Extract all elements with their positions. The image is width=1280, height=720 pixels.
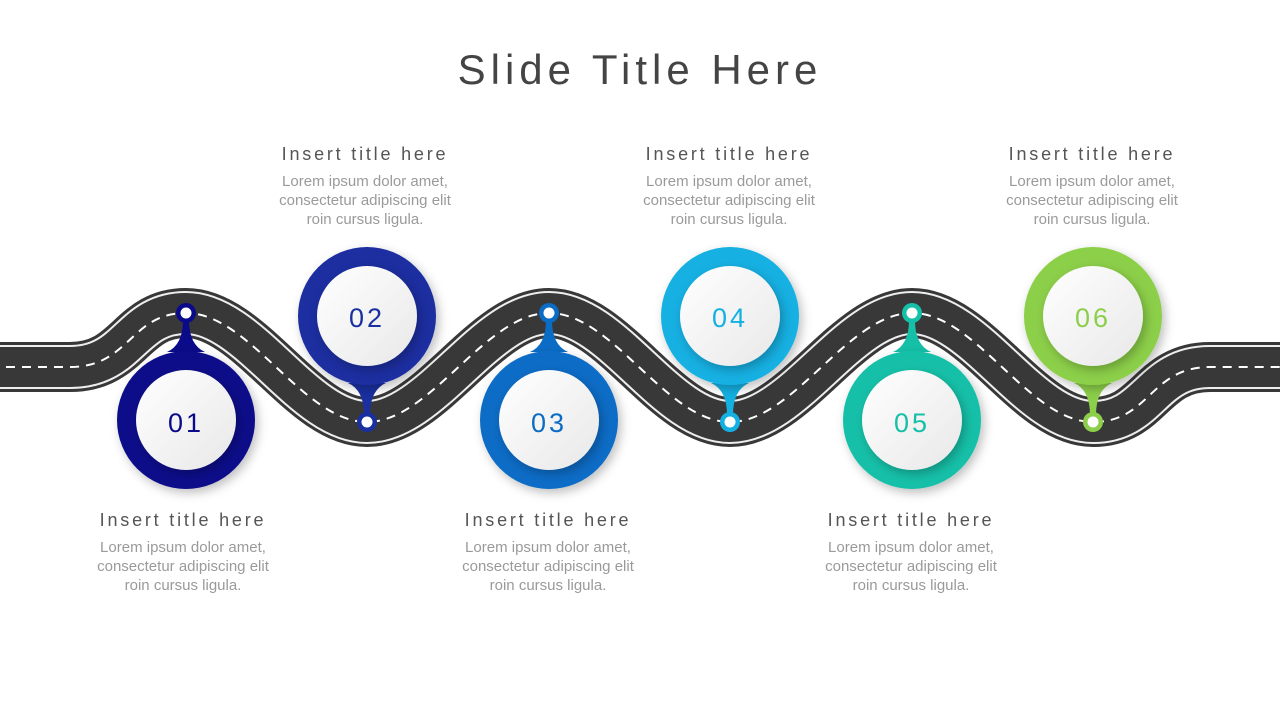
text block 02: consectetur adipiscing elit — [279, 192, 451, 209]
text block 03: roin cursus ligula. — [490, 577, 606, 594]
marker 03 — [480, 303, 618, 489]
marker 02: 02 — [349, 303, 385, 333]
text block 06 — [1006, 144, 1178, 228]
text block 04 — [643, 144, 815, 228]
text block 04: Lorem ipsum dolor amet, — [646, 173, 812, 190]
text block 01: Insert title here — [100, 510, 266, 530]
text block 01: Lorem ipsum dolor amet, — [100, 539, 266, 556]
marker 06: 06 — [1075, 303, 1111, 333]
marker 01 — [117, 303, 255, 489]
text block 04: roin cursus ligula. — [671, 211, 787, 228]
text block 03: Lorem ipsum dolor amet, — [465, 539, 631, 556]
text block 06: Lorem ipsum dolor amet, — [1009, 173, 1175, 190]
road — [0, 313, 1280, 422]
text block 06: consectetur adipiscing elit — [1006, 192, 1178, 209]
marker 01: 01 — [168, 408, 204, 438]
marker 03: 03 — [531, 408, 567, 438]
text block 05: Lorem ipsum dolor amet, — [828, 539, 994, 556]
text block 05: roin cursus ligula. — [853, 577, 969, 594]
marker 06 — [1024, 247, 1162, 432]
text block 03: Insert title here — [465, 510, 631, 530]
marker 05: 05 — [894, 408, 930, 438]
text block 02 — [279, 144, 451, 228]
text block 05 — [825, 510, 997, 594]
marker 05 — [843, 303, 981, 489]
title: Slide Title Here — [458, 46, 822, 93]
text block 05: Insert title here — [828, 510, 994, 530]
text block 01: consectetur adipiscing elit — [97, 558, 269, 575]
text block 03 — [462, 510, 634, 594]
marker 02 — [298, 247, 436, 432]
text block 01 — [97, 510, 269, 594]
marker 04: 04 — [712, 303, 748, 333]
text block 06: Insert title here — [1009, 144, 1175, 164]
text block 02: roin cursus ligula. — [307, 211, 423, 228]
text block 06: roin cursus ligula. — [1034, 211, 1150, 228]
text block 05: consectetur adipiscing elit — [825, 558, 997, 575]
text block 04: consectetur adipiscing elit — [643, 192, 815, 209]
text block 02: Lorem ipsum dolor amet, — [282, 173, 448, 190]
text block 04: Insert title here — [646, 144, 812, 164]
text block 01: roin cursus ligula. — [125, 577, 241, 594]
text block 02: Insert title here — [282, 144, 448, 164]
marker 04 — [661, 247, 799, 432]
text block 03: consectetur adipiscing elit — [462, 558, 634, 575]
